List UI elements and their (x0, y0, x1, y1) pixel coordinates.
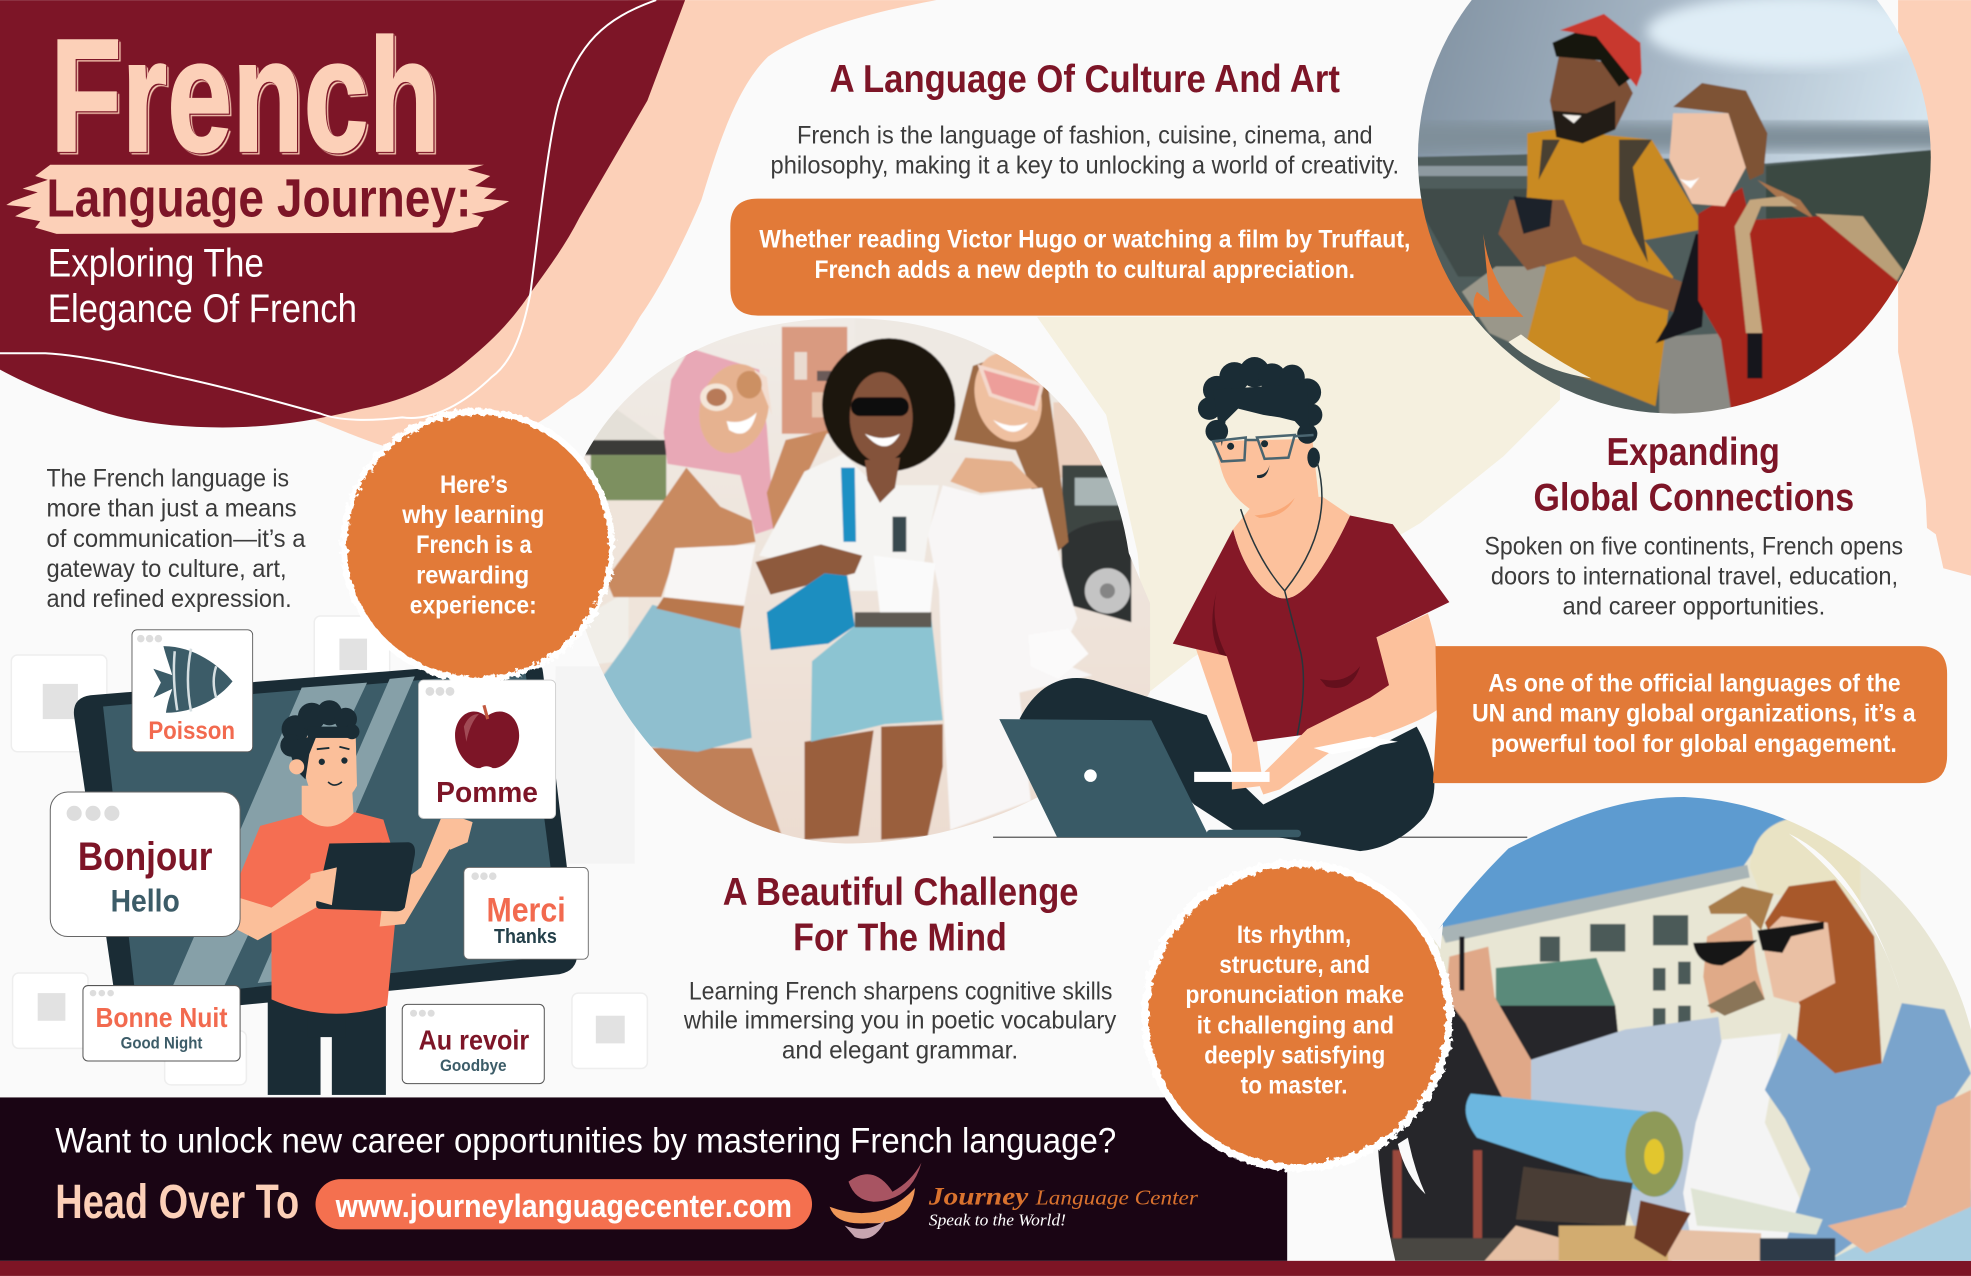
illustration: vocabulary board and man (11, 616, 647, 1095)
section: A Language Of Culture And Art: A Language Of Culture And Art (830, 58, 1340, 101)
white tee (1682, 1033, 1800, 1239)
earphones (1241, 463, 1322, 735)
photo: three friends laughing (553, 314, 1156, 849)
intro paragraph: The French language is (47, 465, 289, 493)
bottom maroon strip (0, 1261, 1971, 1276)
section: A Beautiful Challenge For The Mind (683, 871, 1117, 1064)
circle text: experience: (410, 591, 537, 619)
subtitle: Exploring The (48, 241, 264, 286)
hair (1198, 357, 1322, 446)
section: Expanding Global Connections: Expanding (1606, 431, 1780, 474)
shape: peach wave (126, 0, 936, 455)
card: Merci Thanks (464, 867, 588, 959)
section: Expanding Global Connections: Global Connections (1534, 476, 1854, 519)
woman two (804, 724, 943, 840)
circle text: structure, and (1219, 951, 1370, 979)
circle text: why learning (401, 501, 544, 529)
banner text: Language Journey: (47, 168, 471, 228)
panel: cream backdrop behind student (1037, 317, 1560, 691)
shape: peach right edge (1898, 0, 1971, 576)
accent: orange circle rhythm (1141, 860, 1453, 1172)
logo: Journey Language Center (830, 1163, 1199, 1239)
intro paragraph: gateway to culture, art, (47, 555, 287, 583)
section: A Beautiful Challenge For The Mind: A Beautiful Challenge (723, 871, 1079, 914)
card: Pomme (419, 680, 556, 818)
section: Expanding Global Connections (1485, 431, 1903, 621)
card: Poisson: Poisson (148, 717, 235, 745)
rough white ring (341, 409, 615, 683)
notebook (1194, 772, 1270, 782)
logo: Journey Language Center: Speak to the World! (929, 1211, 1066, 1230)
intro paragraph: of communication—it’s a (47, 525, 305, 553)
section: Expanding Global Connections: Spoken on five continents, French opens (1485, 532, 1903, 560)
woman dress (1765, 1003, 1971, 1261)
subtitle (48, 241, 357, 331)
subtitle: Elegance Of French (48, 286, 357, 331)
section: Expanding Global Connections: and career opportunities. (1562, 593, 1825, 621)
illustration: student with laptop (993, 357, 1527, 851)
logo: Journey Language Center: Language Center (1035, 1185, 1199, 1209)
section: A Beautiful Challenge For The Mind: while immersing you in poetic vocabulary (683, 1006, 1117, 1034)
rough white ring (1141, 860, 1453, 1172)
section: Expanding Global Connections: doors to international travel, education, (1491, 563, 1898, 591)
rough orange disc (1149, 867, 1446, 1164)
card: Bonjour Hello: Bonjour (78, 834, 213, 879)
man (226, 700, 473, 1095)
right arm (1257, 613, 1440, 794)
ground line (993, 837, 1527, 838)
woman three (954, 352, 1068, 552)
section: A Language Of Culture And Art (771, 58, 1399, 180)
rough orange disc (347, 415, 608, 676)
arm across woman two (767, 430, 828, 534)
intro paragraph: and refined expression. (47, 585, 292, 613)
card: Poisson (132, 630, 253, 752)
card: Au revoir Goodbye: Goodbye (440, 1056, 507, 1075)
face details (1227, 440, 1270, 478)
woman one (652, 747, 782, 834)
glasses (1213, 435, 1314, 461)
icon: fish (153, 646, 233, 713)
icon: apple (455, 705, 519, 768)
card: Bonne Nuit Good Night: Good Night (121, 1033, 203, 1052)
faint background cards (11, 616, 647, 1085)
brush stroke (6, 165, 509, 234)
circle text: deeply satisfying (1204, 1041, 1385, 1069)
banner: call to action: Want to unlock new career opportunities by mastering French language? (55, 1122, 1116, 1161)
man in ochre tee (1524, 130, 1698, 406)
card: Merci Thanks: Thanks (494, 926, 557, 948)
circle text (1185, 921, 1404, 1100)
callout: global: UN and many global organizations, it’s a (1472, 700, 1917, 728)
decorative white shards on couple photo (1398, 833, 1901, 1194)
card: Au revoir Goodbye: Au revoir (419, 1025, 529, 1056)
section: A Beautiful Challenge For The Mind: Learning French sharpens cognitive skills (689, 977, 1112, 1005)
white bag behind woman one (586, 597, 628, 664)
panel: title background (0, 0, 685, 427)
accent: orange circle why learning (341, 409, 615, 683)
intro paragraph (47, 465, 305, 613)
legs (1019, 678, 1434, 851)
card: Bonne Nuit Good Night: Bonne Nuit (96, 1002, 228, 1033)
laptop (999, 719, 1301, 837)
board (74, 660, 577, 1016)
card: Bonne Nuit Good Night (83, 986, 240, 1061)
section: A Beautiful Challenge For The Mind: and elegant grammar. (782, 1036, 1018, 1064)
yoga mat (1466, 1094, 1682, 1197)
decorative flame shards on hikers photo (1474, 234, 1591, 378)
section: A Beautiful Challenge For The Mind: For The Mind (793, 916, 1007, 959)
callout: culture: Whether reading Victor Hugo or watching a film by Truffaut, (759, 226, 1410, 254)
section: A Language Of Culture And Art: philosophy, making it a key to unlocking a world of creativity. (771, 152, 1399, 180)
card: Pomme: Pomme (436, 777, 538, 809)
title: French: French (50, 6, 440, 186)
card: Merci Thanks: Merci (486, 891, 566, 929)
logo: Journey Language Center: Journey (928, 1183, 1029, 1210)
card: Au revoir Goodbye (402, 1004, 544, 1084)
shirt (1173, 515, 1449, 742)
circle text: pronunciation make (1185, 981, 1404, 1009)
arm with phone (1446, 947, 1531, 1110)
circle text: rewarding (416, 561, 529, 589)
decorative white line (0, 0, 656, 420)
circle text: it challenging and (1197, 1011, 1394, 1039)
map (1691, 1188, 1823, 1234)
title banner: Language Journey (6, 165, 509, 234)
man head (1703, 914, 1765, 1013)
callout: culture (730, 199, 1508, 316)
man's shirt (1530, 1016, 1722, 1231)
banner: call to action: Head Over To (55, 1176, 299, 1229)
neck and chest (1233, 497, 1350, 598)
woman in red (1815, 214, 1903, 283)
circle text (401, 471, 544, 619)
banner: call to action (0, 1097, 1287, 1261)
url pill (316, 1179, 812, 1229)
card: Bonjour Hello: Hello (111, 883, 180, 918)
face (1213, 439, 1320, 515)
intro paragraph: more than just a means (47, 495, 297, 523)
callout: culture: French adds a new depth to cultural appreciation. (815, 256, 1355, 284)
callout: global: As one of the official languages of the (1488, 669, 1901, 697)
sleeve shading (1212, 591, 1360, 688)
backpack and shorts (1516, 1167, 1633, 1226)
photo: couple with map (1370, 792, 1971, 1263)
left arm (1195, 647, 1263, 789)
circle text: French is a (416, 531, 533, 559)
woman hair (1765, 880, 1882, 1091)
url pill: www.journeylanguagecenter.com (335, 1187, 792, 1224)
callout: global (1433, 646, 1947, 783)
callout: global: powerful tool for global engagement. (1491, 730, 1897, 758)
section: A Language Of Culture And Art: French is the language of fashion, cuisine, cinema, and (797, 121, 1373, 149)
circle text: to master. (1241, 1072, 1348, 1100)
circle text: Here’s (440, 471, 508, 499)
card: Bonjour Hello (50, 792, 240, 937)
circle text: Its rhythm, (1237, 921, 1351, 949)
photo: hikers with camera (1408, 0, 1948, 427)
